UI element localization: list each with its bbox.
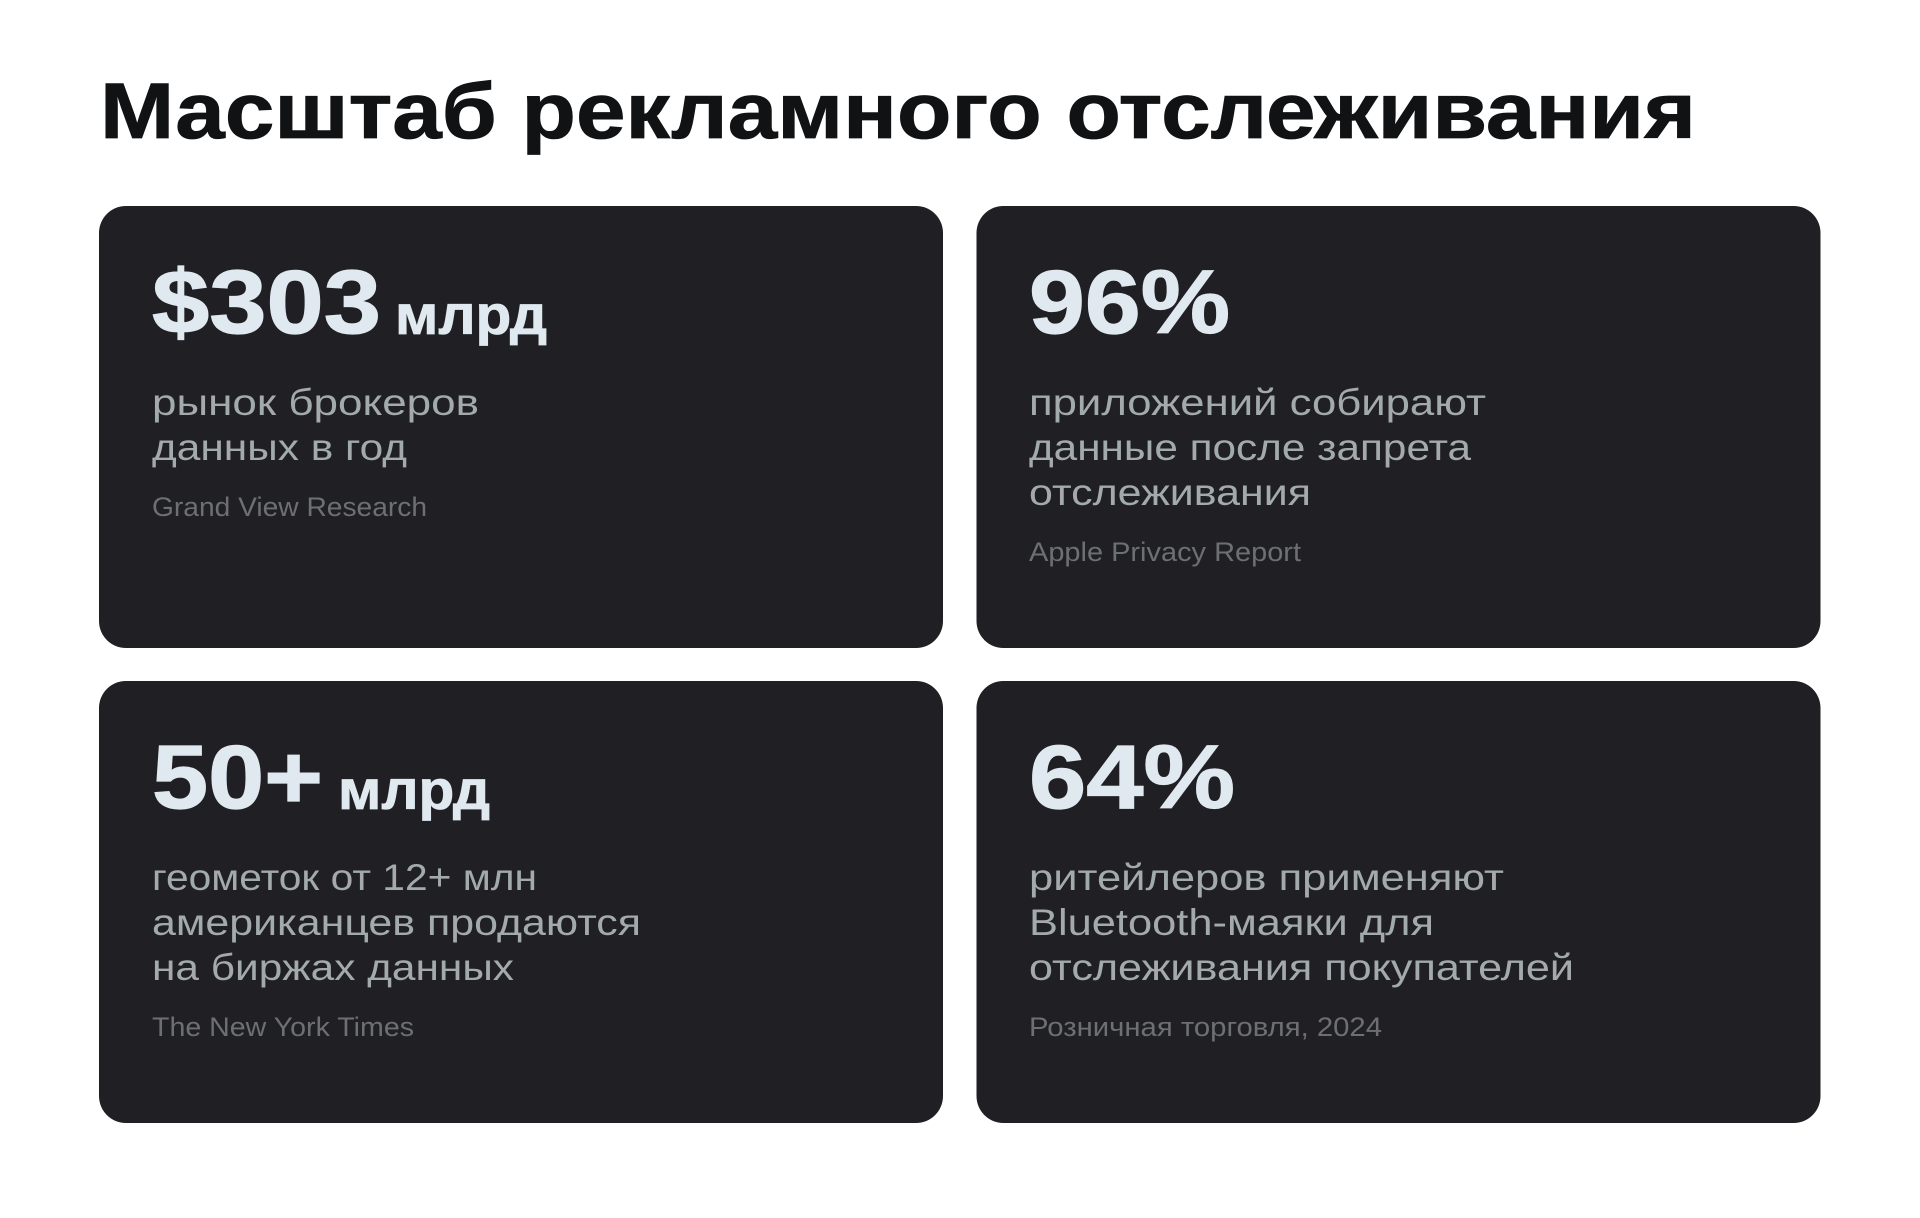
description: data broker market: данных в год [152, 427, 407, 468]
stat: $303 billion [152, 253, 547, 353]
stat: 96%: 96% [1029, 253, 1230, 353]
description: apps collecting data [1029, 382, 1486, 513]
stat: 50+ billion: 50+ [152, 728, 323, 828]
description: Bluetooth beacons: отслеживания покупателей [1029, 947, 1574, 988]
stat: 64%: 64% [1029, 728, 1235, 828]
stat: $303 billion: $303 [152, 253, 381, 353]
panel: apps collecting data [976, 206, 1820, 648]
description: Bluetooth beacons [1029, 857, 1574, 988]
source: The New York Times: The New York Times [152, 1012, 414, 1042]
description: geotags: американцев продаются [152, 902, 641, 943]
panel: retailers using Bluetooth beacons [976, 681, 1820, 1123]
source: Apple Privacy Report: Apple Privacy Report [1029, 537, 1302, 567]
stat: 50+ billion [152, 728, 490, 828]
description: apps collecting data: приложений собирают [1029, 382, 1486, 423]
panel: data broker market [99, 206, 943, 648]
description: Bluetooth beacons: Bluetooth-маяки для [1029, 902, 1434, 943]
stat: 50+ billion: млрд [338, 758, 490, 821]
description: apps collecting data: отслеживания [1029, 472, 1311, 513]
source: Grand View Research: Grand View Research [152, 492, 427, 522]
source: retail 2024: Розничная торговля, 2024 [1029, 1012, 1382, 1042]
description: geotags [152, 857, 641, 988]
panel: geotags sold on exchanges [99, 681, 943, 1123]
description: geotags: на биржах данных [152, 947, 515, 988]
title: Масштаб рекламного отслеживания [100, 66, 1696, 155]
description: Bluetooth beacons: ритейлеров применяют [1029, 857, 1504, 898]
stat: $303 billion: млрд [395, 283, 547, 346]
description: geotags: геометок от 12+ млн [152, 857, 537, 898]
description: data broker market [152, 382, 479, 468]
description: data broker market: рынок брокеров [152, 382, 479, 423]
description: apps collecting data: данные после запрета [1029, 427, 1471, 468]
